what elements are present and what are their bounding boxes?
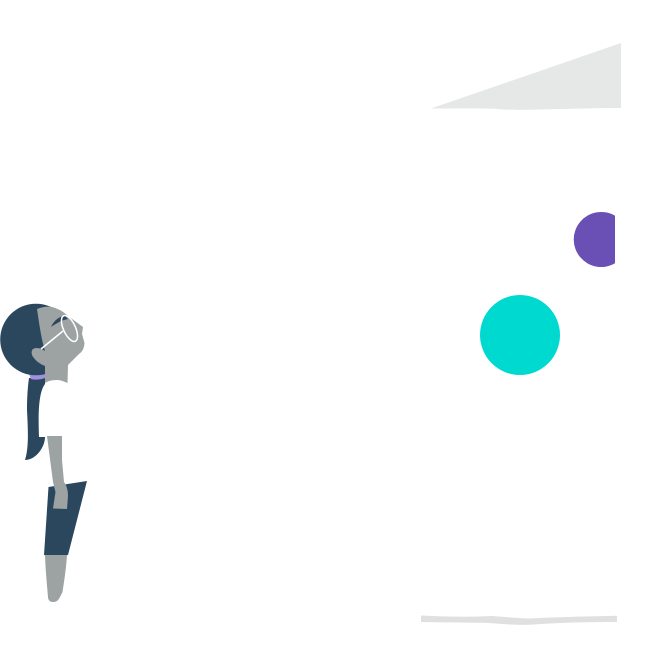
glasses bbox=[41, 313, 81, 349]
hair bbox=[0, 304, 72, 375]
figure: woman looking up bbox=[0, 304, 87, 602]
arm and hand bbox=[47, 436, 68, 509]
glasses arm bbox=[41, 331, 63, 349]
ground line bbox=[421, 616, 617, 625]
eyebrow bbox=[51, 316, 68, 327]
purple half circle bbox=[574, 212, 615, 267]
teal circle bbox=[480, 295, 560, 375]
face and neck bbox=[32, 307, 84, 383]
grey triangle roof bbox=[431, 43, 621, 110]
glasses lens bbox=[58, 313, 81, 344]
leg bbox=[45, 555, 67, 602]
skirt bbox=[44, 481, 87, 555]
collar bbox=[29, 374, 46, 380]
ponytail bbox=[25, 378, 45, 460]
